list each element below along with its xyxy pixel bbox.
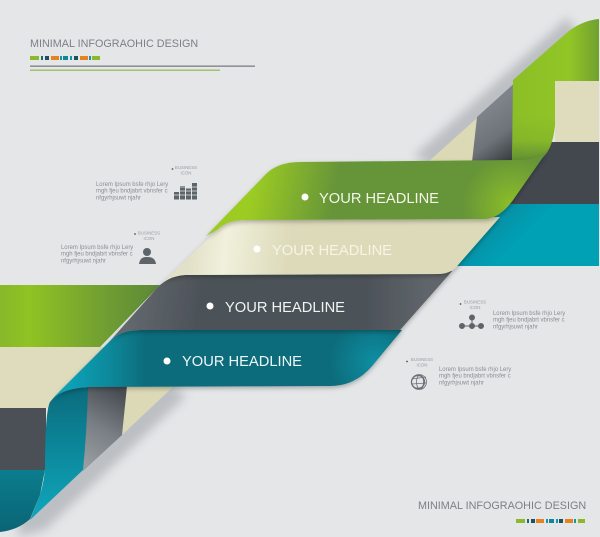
callout: network: BUSINESS bbox=[464, 300, 486, 304]
callout: chart: mgh fjeu bndjabrt vbnsfer c bbox=[96, 189, 168, 195]
headline: cream band: YOUR HEADLINE bbox=[272, 243, 392, 259]
band: cream bbox=[157, 217, 500, 288]
callout: person: mgh fjeu bndjabrt vbnsfer c bbox=[61, 252, 133, 258]
top color strip bbox=[30, 56, 100, 60]
right color bands bbox=[455, 81, 599, 266]
band: teal bbox=[53, 330, 402, 398]
callout: network bbox=[460, 300, 565, 330]
callout: person: nfgyrhjsuwt njahr bbox=[61, 258, 106, 264]
band: dark gray bbox=[110, 271, 452, 341]
callout: network: nfgyrhjsuwt njahr bbox=[493, 324, 538, 330]
callout: person bbox=[61, 230, 160, 264]
shadow: upper fold bbox=[414, 17, 580, 170]
callout: globe: ICON bbox=[417, 362, 427, 368]
icon: globe bbox=[412, 374, 426, 390]
upper twist: cream and gray strips bbox=[428, 80, 518, 162]
callout: network: Lorem Ipsum bsfe rhjo Lery bbox=[493, 311, 565, 317]
bottom title: MINIMAL INFOGRAOHIC DESIGN bbox=[418, 500, 586, 512]
callout: network: mgh fjeu bndjabrt vbnsfer c bbox=[493, 318, 565, 324]
bottom color strip bbox=[516, 519, 585, 523]
headline: gray band: YOUR HEADLINE bbox=[225, 300, 345, 316]
icon: bar chart bbox=[173, 183, 198, 200]
lower twist: teal fold bbox=[30, 387, 88, 520]
callout: chart: ICON bbox=[181, 170, 191, 176]
top title: MINIMAL INFOGRAOHIC DESIGN bbox=[30, 38, 198, 50]
headline: green band: YOUR HEADLINE bbox=[319, 191, 439, 207]
callout: chart bbox=[96, 165, 198, 201]
shadow: lower fold bbox=[18, 380, 186, 537]
callout: chart: Lorem Ipsum bsfe rhjo Lery bbox=[96, 182, 168, 188]
headline: teal band: YOUR HEADLINE bbox=[182, 354, 302, 370]
callout: globe bbox=[406, 357, 511, 390]
callout: person: BUSINESS bbox=[138, 230, 160, 236]
icon: network bbox=[460, 315, 484, 328]
icon: person bbox=[139, 248, 156, 264]
callout: network: ICON bbox=[470, 305, 480, 310]
callout: globe: mgh fjeu bndjabrt vbnsfer c bbox=[439, 374, 511, 380]
callout: person: ICON bbox=[144, 236, 154, 241]
callout: globe: nfgyrhjsuwt njahr bbox=[439, 380, 484, 386]
top divider lines bbox=[30, 66, 255, 71]
left color bands bbox=[0, 285, 160, 532]
lower twist: cream and gray strips bbox=[83, 386, 174, 471]
callout: globe: BUSINESS bbox=[411, 357, 433, 362]
band: green bbox=[206, 150, 548, 236]
callout: globe: Lorem Ipsum bsfe rhjo Lery bbox=[439, 367, 511, 373]
callout: person: Lorem Ipsum bsfe rhjo Lery bbox=[61, 245, 133, 251]
upper twist: green fold bbox=[512, 19, 599, 162]
callout: chart: nfgyrhjsuwt njahr bbox=[96, 195, 141, 201]
callout: chart: BUSINESS bbox=[175, 165, 197, 170]
